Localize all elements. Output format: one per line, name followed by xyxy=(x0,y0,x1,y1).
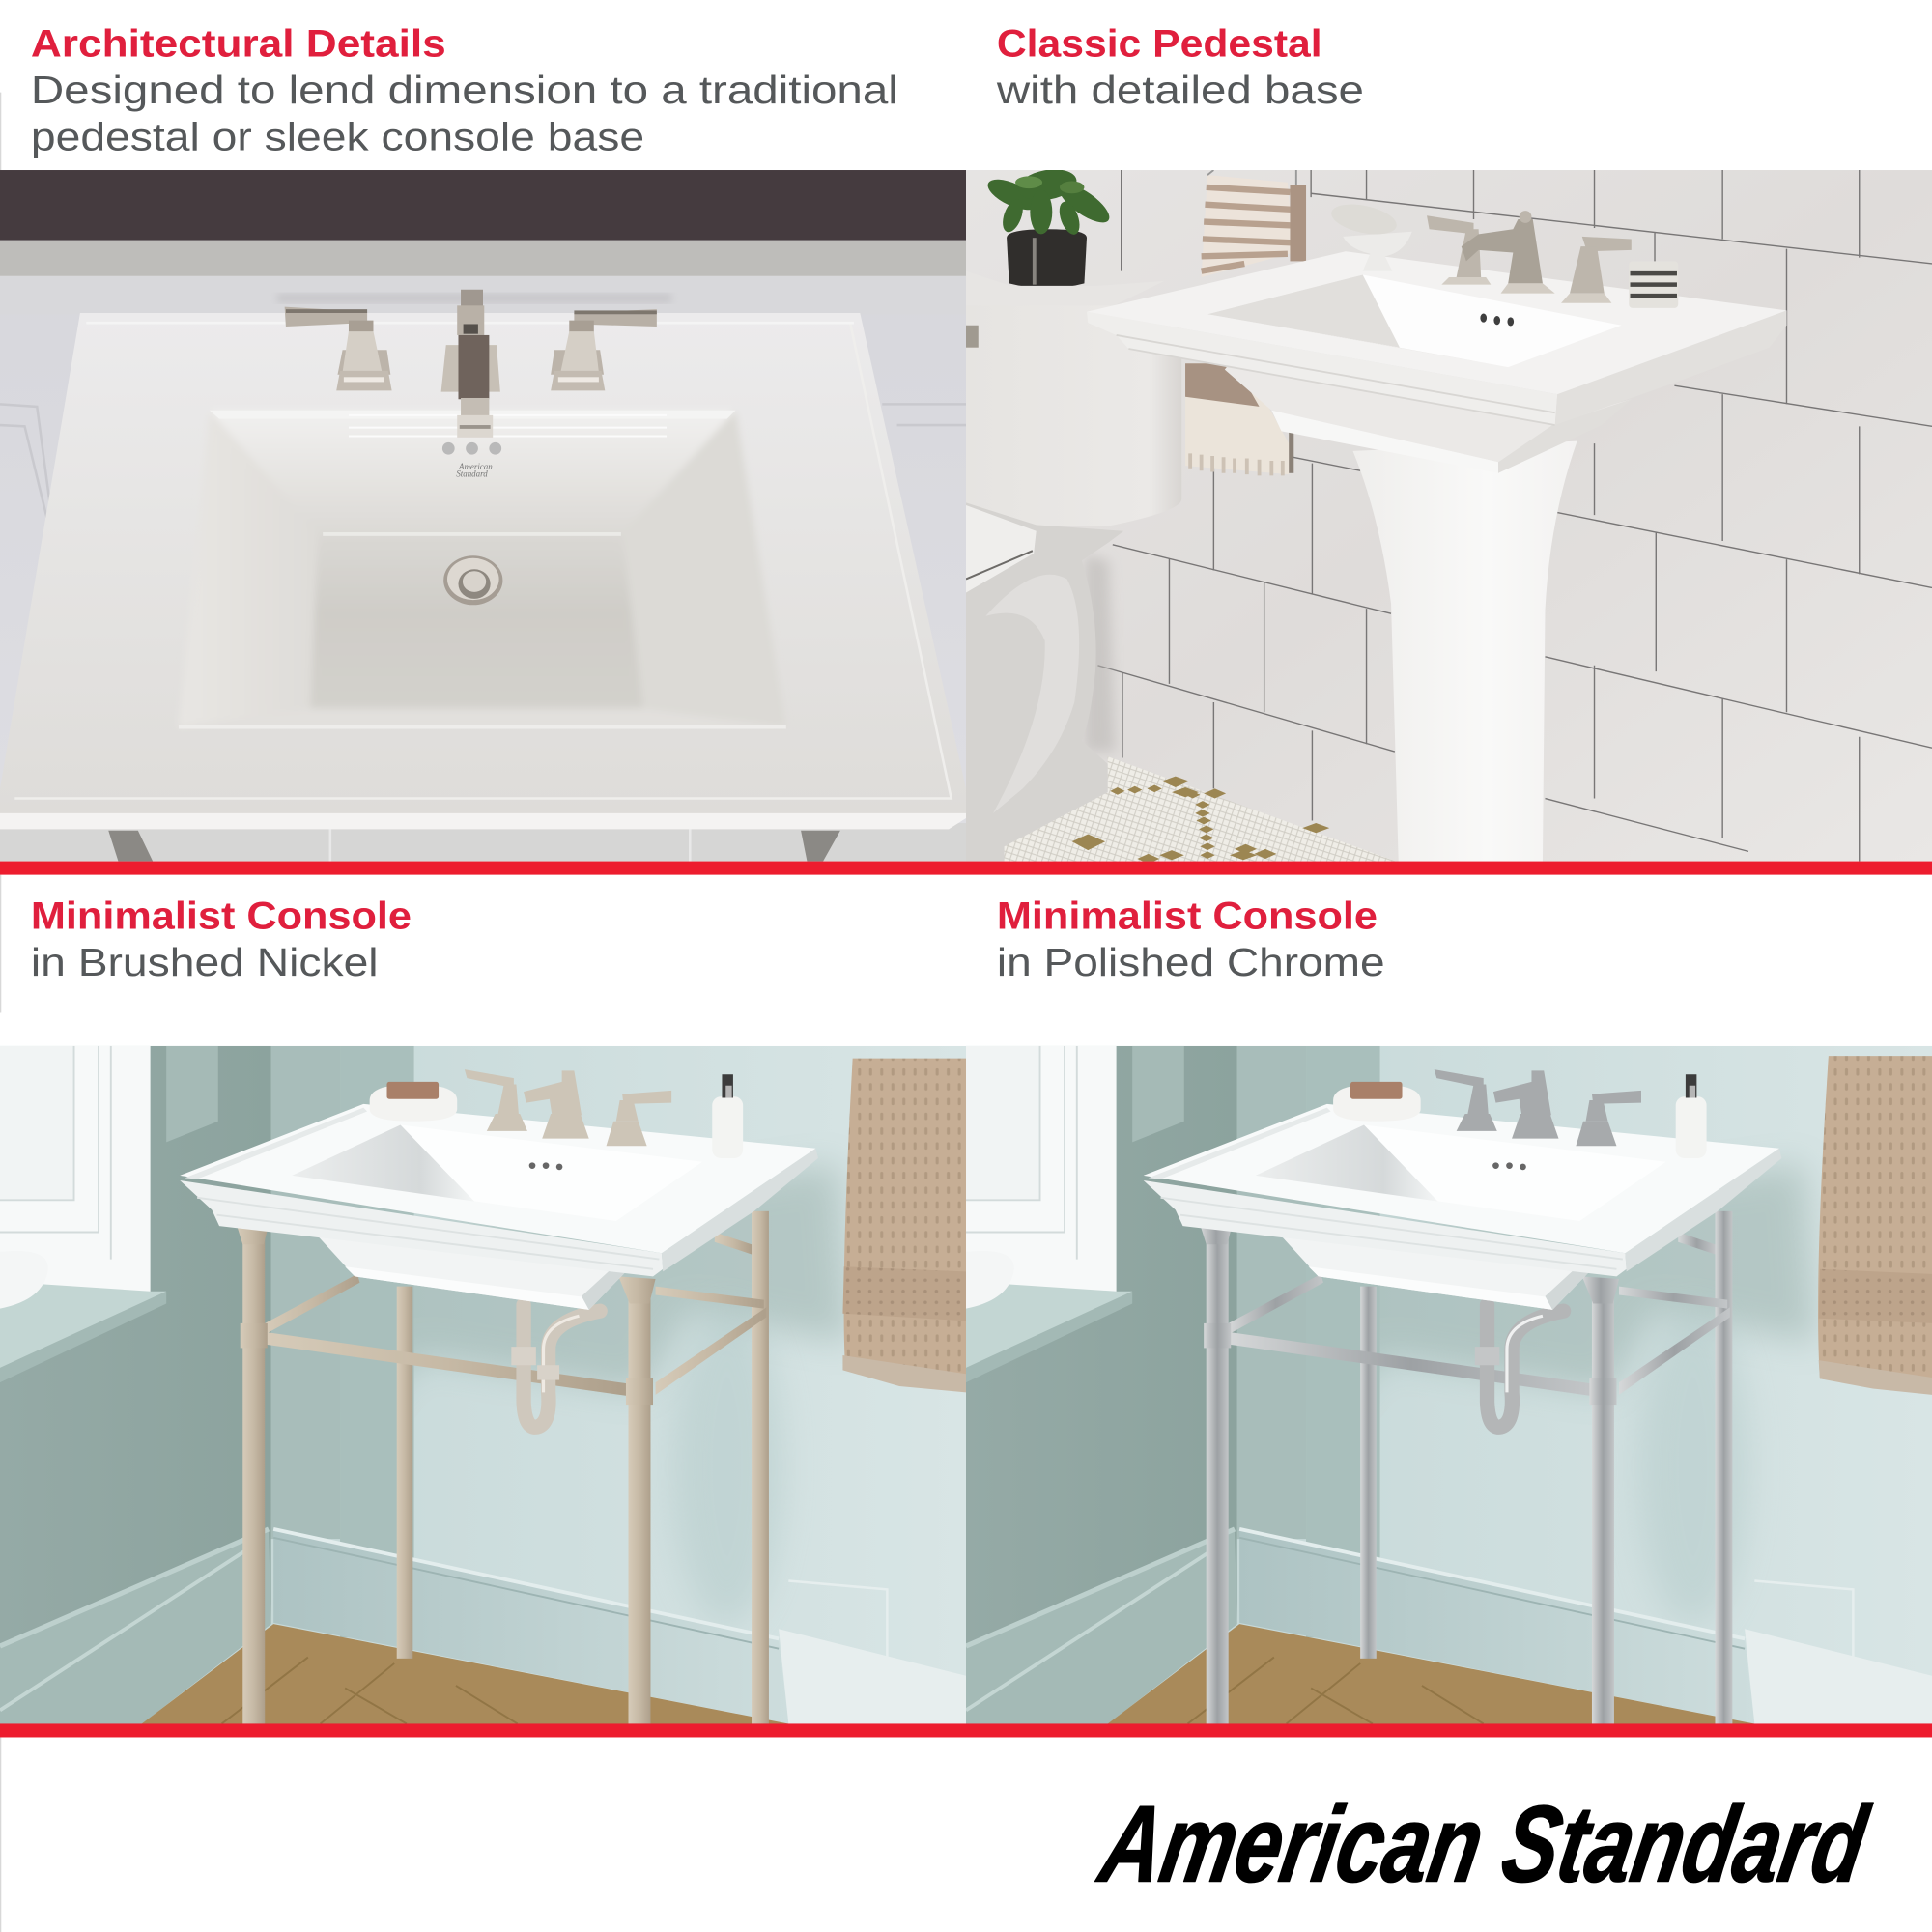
photo: sink top view xyxy=(0,170,966,862)
heading: architectural details xyxy=(31,23,898,159)
photo: pedestal sink in tiled bathroom xyxy=(966,165,1932,864)
heading: architectural details: pedestal or sleek console base xyxy=(31,115,644,159)
heading: classic pedestal: Classic Pedestal xyxy=(997,23,1322,66)
sink slab xyxy=(1087,251,1786,425)
icon: logo stamp on basin: American xyxy=(458,462,493,471)
hanging towel striped xyxy=(1202,170,1306,277)
toilet bowl xyxy=(966,502,1123,862)
heading: architectural details: Designed to lend dimension to a traditional xyxy=(31,68,898,112)
basin xyxy=(179,411,786,727)
icon: faucet top view xyxy=(285,290,657,438)
towel chrome scene xyxy=(1818,1056,1932,1395)
plant xyxy=(987,170,1109,286)
heading: brushed nickel xyxy=(31,895,412,984)
heading: classic pedestal: with detailed base xyxy=(996,68,1364,112)
soap dish xyxy=(1331,205,1412,257)
icon: drain xyxy=(443,555,502,605)
heading: polished chrome xyxy=(997,895,1385,984)
heading: architectural details: Architectural Details xyxy=(31,23,446,66)
heading: polished chrome: in Polished Chrome xyxy=(997,940,1385,984)
toilet tank xyxy=(966,271,1181,526)
faucet nickel xyxy=(465,1069,671,1146)
heading: brushed nickel: in Brushed Nickel xyxy=(31,940,379,984)
panel: classic pedestal xyxy=(966,23,1932,864)
photo: console brushed nickel xyxy=(0,1046,966,1723)
faucet xyxy=(1427,211,1632,303)
panel: architectural details xyxy=(0,23,966,862)
photo: console polished chrome xyxy=(966,1046,1932,1723)
pedestal column xyxy=(1353,441,1577,862)
p-trap xyxy=(511,1305,600,1427)
icon: logo stamp on basin: Standard xyxy=(456,469,488,479)
heading: classic pedestal xyxy=(996,23,1364,112)
floor mosaic xyxy=(1005,756,1396,864)
panel: minimalist console brushed nickel xyxy=(0,895,966,1723)
lower towel xyxy=(1185,363,1293,475)
red divider 1 xyxy=(0,862,1932,875)
panel: minimalist console polished chrome xyxy=(966,895,1932,1723)
pedestal capital xyxy=(1225,359,1632,473)
striped jar xyxy=(1629,261,1678,308)
red divider 2 xyxy=(0,1723,1932,1737)
icon: logo stamp on basin xyxy=(456,464,493,477)
towel xyxy=(842,1059,966,1392)
heading: brushed nickel: Minimalist Console xyxy=(31,895,412,938)
heading: polished chrome: Minimalist Console xyxy=(997,895,1378,938)
